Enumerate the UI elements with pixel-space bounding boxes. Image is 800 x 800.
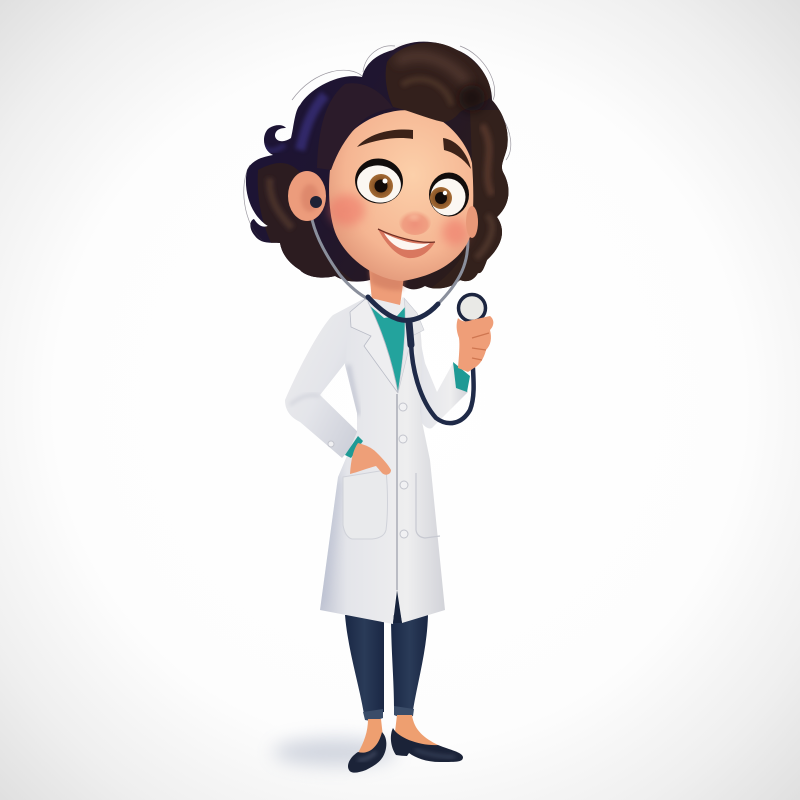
stethoscope	[310, 203, 474, 423]
brown right lobes	[431, 110, 508, 288]
coat body	[320, 297, 445, 624]
right ear	[466, 206, 478, 238]
legs	[345, 615, 428, 721]
neck	[369, 268, 405, 322]
right pocket	[416, 473, 440, 538]
hair outline wisps	[244, 46, 511, 240]
ear	[288, 171, 326, 221]
elbow crease and arm shadow	[290, 395, 320, 405]
ground shadow	[273, 738, 397, 766]
hair front	[317, 42, 491, 170]
nose	[399, 209, 431, 235]
shirt cuffs	[345, 362, 470, 458]
navy highlight	[300, 95, 325, 150]
coat buttons	[328, 403, 408, 538]
feet and shoes	[348, 715, 463, 773]
left pocket	[343, 470, 388, 539]
coat	[285, 297, 468, 624]
teal shirt	[370, 306, 408, 392]
coat details	[343, 394, 440, 623]
eyebrows	[357, 130, 471, 169]
left eye	[351, 155, 407, 207]
lapels	[350, 295, 424, 393]
raised hand	[457, 316, 493, 372]
face	[329, 110, 473, 281]
hand in pocket	[350, 443, 391, 475]
brown lower left lobes	[258, 163, 360, 285]
left arm sleeve	[285, 297, 367, 458]
right eye	[429, 172, 469, 216]
stethoscope chest piece	[458, 294, 486, 322]
mouth	[378, 229, 435, 258]
right arm sleeve	[410, 315, 468, 428]
cheeks	[329, 194, 468, 246]
hair back	[246, 42, 508, 290]
